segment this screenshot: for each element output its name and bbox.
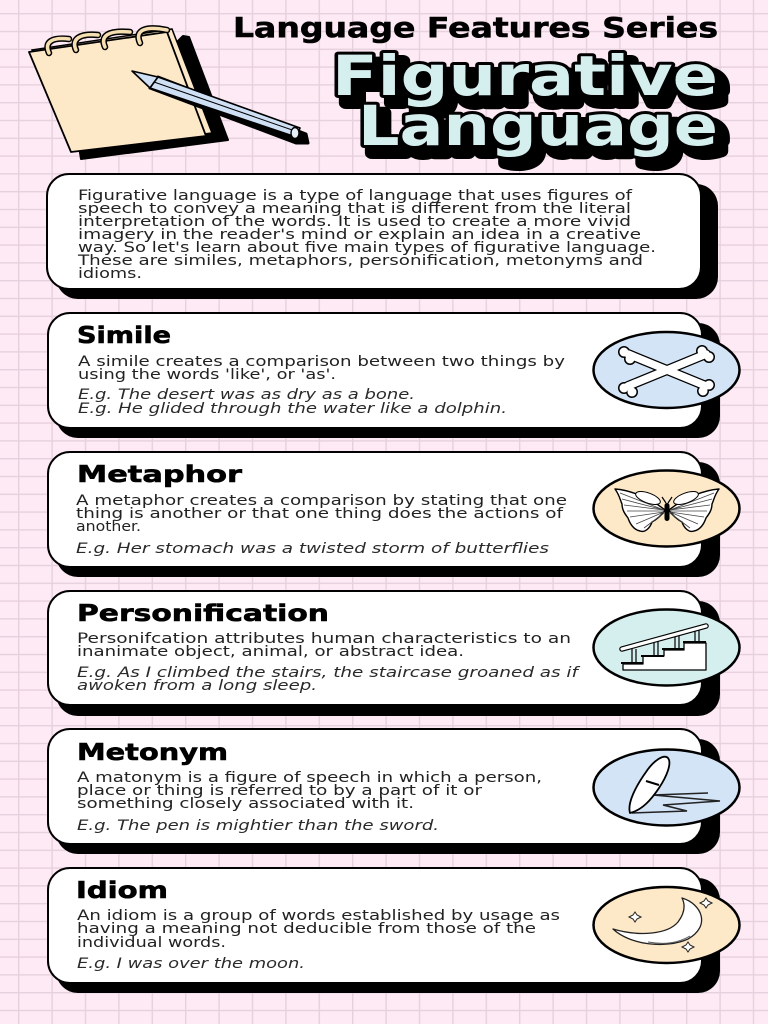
heading: Idiom: Idiom (76, 878, 168, 904)
subtitle: Language Features Series: Language Features Series (233, 11, 718, 44)
text: metonym definition: A matonym is a figure of speech in which a person, (77, 770, 542, 786)
title: Figurative Language: Figurative (332, 44, 718, 108)
title: Figurative Language (332, 44, 726, 166)
text: metaphor definition (76, 493, 567, 535)
text: idiom definition (77, 908, 560, 951)
text: introduction paragraph: Figurative language is a type of language that uses figures of (78, 188, 633, 204)
icon: crescent moon and stars (594, 887, 740, 963)
text: simile examples (78, 387, 507, 417)
heading: Simile: Simile (77, 323, 171, 349)
text: introduction paragraph: way. So let's learn about five main types of figurative language. (78, 240, 656, 256)
icon: butterfly (594, 470, 740, 546)
text: metaphor definition: another. (76, 519, 141, 535)
title: Figurative Language: Figurative (340, 52, 726, 116)
text: personification definition: inanimate object, animal, or abstract idea. (77, 644, 464, 660)
heading: Personification: Personification (77, 601, 329, 627)
text: metaphor example: E.g. Her stomach was a twisted storm of butterflies (76, 541, 550, 557)
panel: simile (48, 313, 740, 438)
text: introduction paragraph: These are similes, metaphors, personification, metonyms and (77, 253, 643, 269)
panel: idiom (48, 868, 740, 993)
text: introduction paragraph: interpretation of the words. It is used to create a more vivid (78, 214, 631, 230)
text: idiom example: E.g. I was over the moon. (77, 956, 305, 972)
text: metaphor definition: A metaphor creates a comparison by stating that one (76, 493, 567, 509)
panel: metaphor (48, 452, 740, 577)
text: idiom definition: An idiom is a group of words established by usage as (77, 908, 560, 924)
icon: staircase (594, 610, 740, 686)
title: Figurative Language: Language (366, 102, 726, 166)
text: introduction paragraph: idioms. (78, 266, 142, 282)
text: simile definition: A simile creates a comparison between two things by (78, 354, 566, 370)
icon: pen writing (594, 750, 740, 826)
text: metonym definition (77, 770, 542, 812)
text: idiom definition: individual words. (77, 935, 226, 951)
text: simile definition: using the words 'like', or 'as'. (78, 367, 336, 383)
text: metonym definition: place or thing is referred to by a part of it or (77, 783, 482, 799)
text: metonym definition: something closely associated with it. (77, 796, 414, 812)
text: metaphor definition: thing is another or that one thing does the actions of (76, 506, 564, 522)
text: idiom definition: having a meaning not deducible from those of the (77, 921, 536, 937)
text: simile examples: E.g. The desert was as dry as a bone. (78, 387, 415, 403)
text: metonym example: E.g. The pen is mightier than the sword. (77, 818, 439, 834)
text: personification example: awoken from a long sleep. (77, 678, 317, 694)
icon: crossed bones (594, 332, 740, 408)
heading: Metaphor: Metaphor (77, 462, 243, 488)
text: introduction paragraph: imagery in the reader's mind or explain an idea in a creative (78, 227, 641, 243)
title: Figurative Language: Language (358, 94, 718, 158)
text: personification example: E.g. As I climbed the stairs, the staircase groaned as if (77, 665, 580, 681)
text: simile examples: E.g. He glided through the water like a dolphin. (78, 401, 507, 417)
heading: Metonym: Metonym (77, 740, 228, 766)
text: introduction paragraph: speech to convey a meaning that is different from the literal (78, 201, 631, 217)
text: personification definition: Personifcation attributes human characteristics to an (77, 631, 571, 647)
icon: notepad and pencil (29, 28, 308, 159)
text: personification definition (77, 631, 571, 660)
panel: personification (48, 591, 740, 716)
text: introduction paragraph (77, 188, 656, 282)
text: simile definition (78, 354, 566, 383)
panel: introduction (47, 174, 718, 299)
text: personification example (77, 665, 580, 694)
panel: metonym (48, 729, 740, 854)
